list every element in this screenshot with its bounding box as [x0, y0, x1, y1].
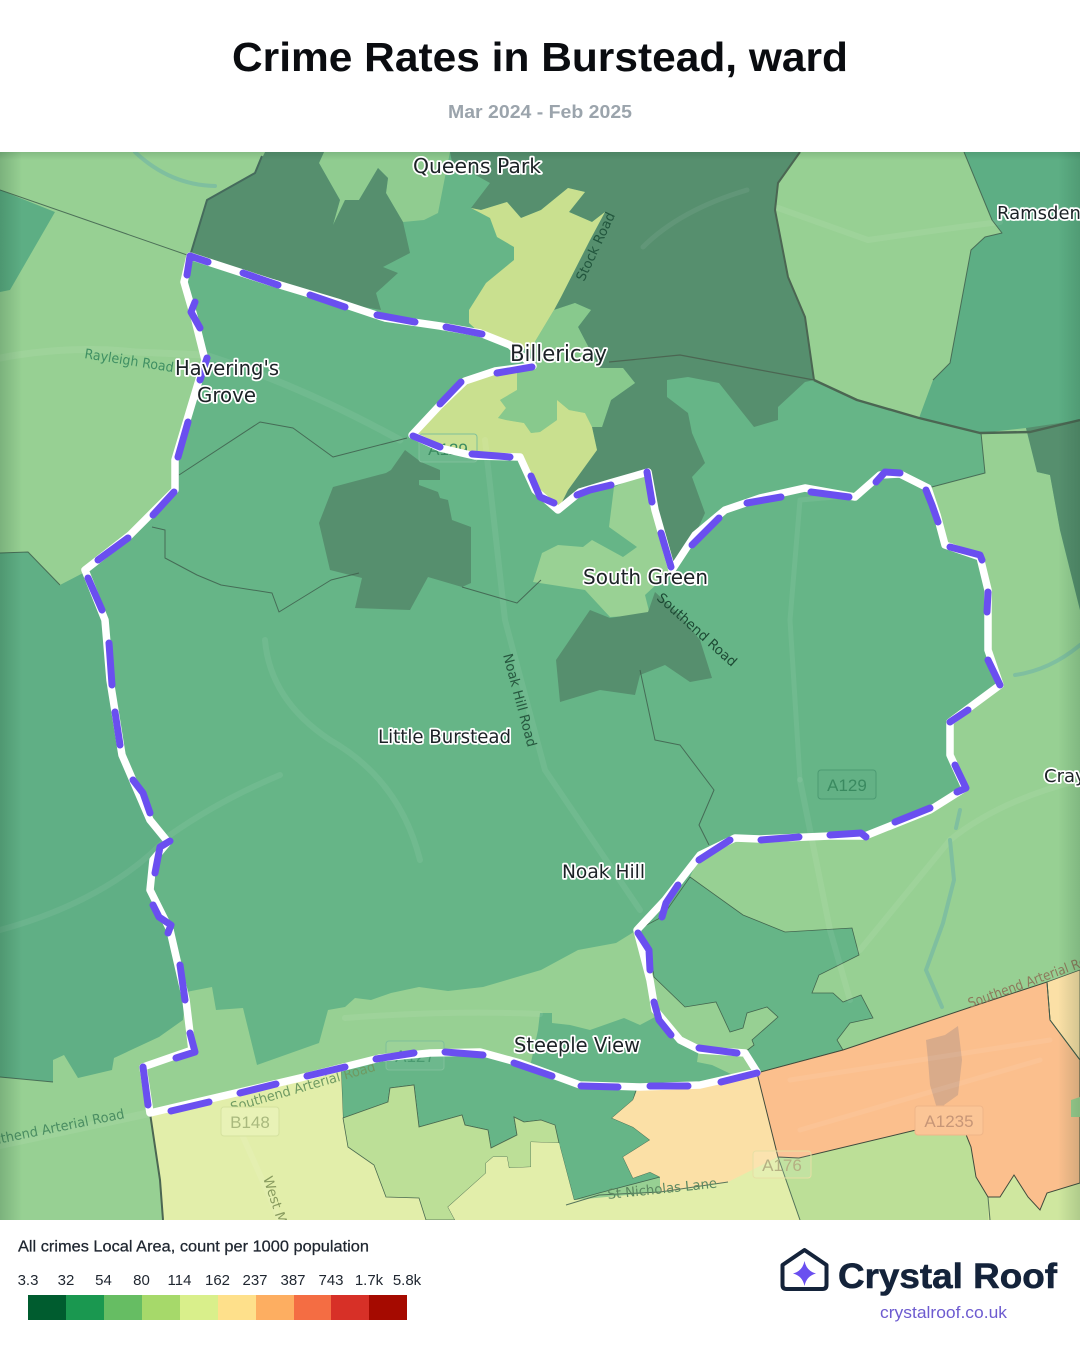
legend tick values: 387	[280, 1272, 306, 1289]
area: south pale yellow	[448, 1142, 800, 1220]
legend colour scale	[28, 1295, 407, 1320]
map base: mid green areas	[0, 152, 1080, 1078]
label: Havering's Grove: Havering's	[175, 356, 279, 380]
retail patch in orange area	[926, 1026, 962, 1112]
area: pale lime south-east corner	[988, 1175, 1080, 1220]
area: south mid green below road	[341, 1052, 660, 1200]
legend	[18, 1238, 422, 1320]
logo: Crystal Roof	[782, 1250, 1057, 1322]
vignette edges	[0, 152, 1080, 1220]
legend tick values: 114	[168, 1272, 191, 1289]
road network	[0, 188, 1003, 1017]
road label: St Nicholas Lane: St Nicholas Lane	[607, 1176, 718, 1203]
shield: A1235	[915, 1106, 983, 1135]
shield: A176	[753, 1151, 811, 1178]
label: Ramsden: Ramsden	[997, 203, 1080, 224]
label: Steeple View: Steeple View	[514, 1033, 640, 1057]
shield: A129 west: A129	[428, 440, 468, 459]
legend tick values: 5.8k	[393, 1272, 422, 1289]
legend title: All crimes Local Area, count per 1000 population	[18, 1238, 369, 1256]
area: pale orange	[612, 1073, 778, 1192]
road label: Southend Arterial Road middle: Southend Arterial Road	[229, 1059, 377, 1116]
area: lime green south-east	[778, 1122, 988, 1220]
shield: A127: A127	[395, 1047, 435, 1066]
shield: A129 east	[818, 770, 876, 799]
area: Steeple View mid green	[530, 1013, 733, 1085]
area: north-west corner mid green	[10, 194, 54, 286]
area: south lime green	[343, 1085, 559, 1220]
shield: A1235: A1235	[924, 1112, 974, 1131]
title: Crime Rates in Burstead, ward	[232, 34, 848, 80]
legend tick values: 743	[318, 1272, 344, 1289]
logo wordmark: Crystal Roof	[838, 1257, 1057, 1296]
shield: A127	[386, 1041, 444, 1070]
area: dark north-west	[190, 152, 410, 310]
shield: A129 west	[419, 434, 477, 462]
area: north-east mid green	[919, 152, 1080, 433]
road shields	[221, 434, 983, 1178]
road label: Southend Road: Southend Road	[653, 590, 740, 670]
area: yellow-green north Billericay	[469, 188, 605, 350]
rivers and ponds	[135, 152, 1080, 1007]
legend tick values: 32	[58, 1272, 74, 1289]
legend tick values: 162	[205, 1272, 230, 1289]
area: dark South Green	[556, 592, 712, 702]
road label: Noak Hill Road: Noak Hill Road	[499, 652, 539, 749]
area: light green around Billericay centre	[498, 303, 635, 433]
area: south-west pale yellow	[150, 1068, 426, 1220]
thick district boundary lines	[150, 152, 1080, 1220]
road labels	[0, 210, 1080, 1257]
label: Havering's Grove	[175, 356, 279, 407]
area: big dark north	[450, 152, 814, 570]
legend tick values: 1.7k	[355, 1272, 384, 1289]
area: south mid green blob inside ring	[637, 877, 873, 1073]
ward boundary: white outline	[85, 256, 1000, 1113]
area: west mid green	[0, 552, 186, 1082]
legend tick values	[18, 1272, 422, 1289]
label: Queens Park: Queens Park	[413, 154, 541, 178]
area: light green South Green	[533, 472, 672, 617]
area: dark east strip	[1026, 420, 1080, 610]
label: Little Burstead: Little Burstead	[378, 726, 511, 748]
legend tick values: 54	[95, 1272, 112, 1289]
legend tick values: 80	[133, 1272, 150, 1289]
area: north-east light green	[775, 152, 1002, 418]
place labels	[175, 154, 1080, 1057]
road label: West Mayne: West Mayne	[259, 1174, 300, 1257]
logo url: crystalroof.co.uk	[880, 1304, 1008, 1322]
label: Billericay: Billericay	[510, 342, 607, 367]
area: yellow-green south Billericay	[418, 373, 597, 505]
legend tick values: 3.3	[18, 1272, 38, 1289]
shield: B148	[221, 1107, 279, 1136]
road label: Stock Road: Stock Road	[573, 210, 619, 284]
ward boundary: purple dashes	[88, 256, 1000, 1111]
shield: B148: B148	[230, 1113, 270, 1132]
label: Havering's Grove: Grove	[197, 383, 256, 407]
area: orange high crime	[757, 982, 1080, 1210]
shield: A176: A176	[762, 1156, 802, 1175]
area: west light green	[0, 152, 268, 585]
area: dark centre	[319, 450, 471, 610]
area: north light green patch below Queens Park	[319, 152, 450, 225]
subtitle: date range: Mar 2024 - Feb 2025	[448, 102, 632, 122]
small green patch in orange area	[1071, 1097, 1080, 1117]
label: South Green: South Green	[583, 565, 708, 589]
icon: house with star	[782, 1250, 826, 1289]
road label: Rayleigh Road: Rayleigh Road	[83, 346, 175, 376]
shield: A129 east: A129	[827, 776, 867, 795]
area: south and east light green	[0, 428, 1080, 1220]
legend tick values: 237	[242, 1272, 268, 1289]
area: pale orange north-east corner	[1047, 970, 1080, 1060]
label: Noak Hill: Noak Hill	[562, 861, 645, 883]
area borders	[0, 152, 1080, 1220]
